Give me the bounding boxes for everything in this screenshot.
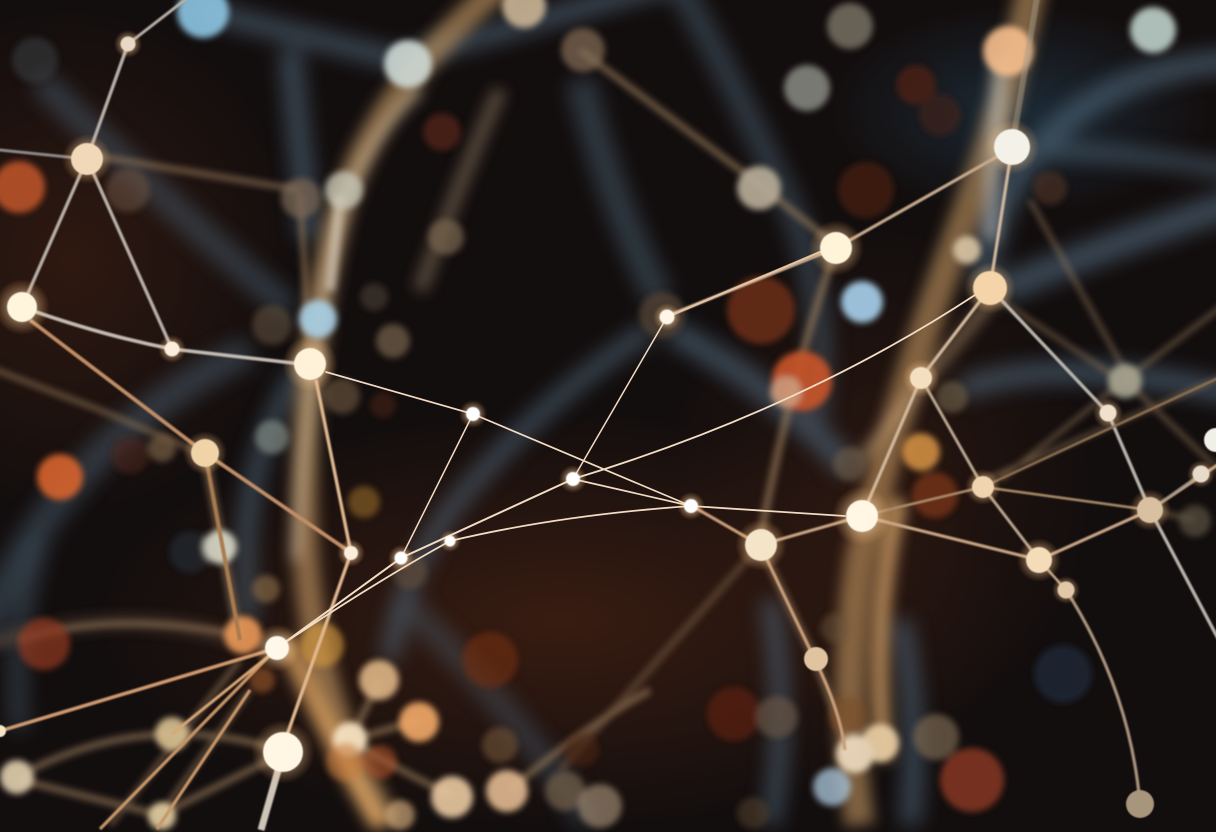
- sharp focus filaments: [277, 252, 975, 648]
